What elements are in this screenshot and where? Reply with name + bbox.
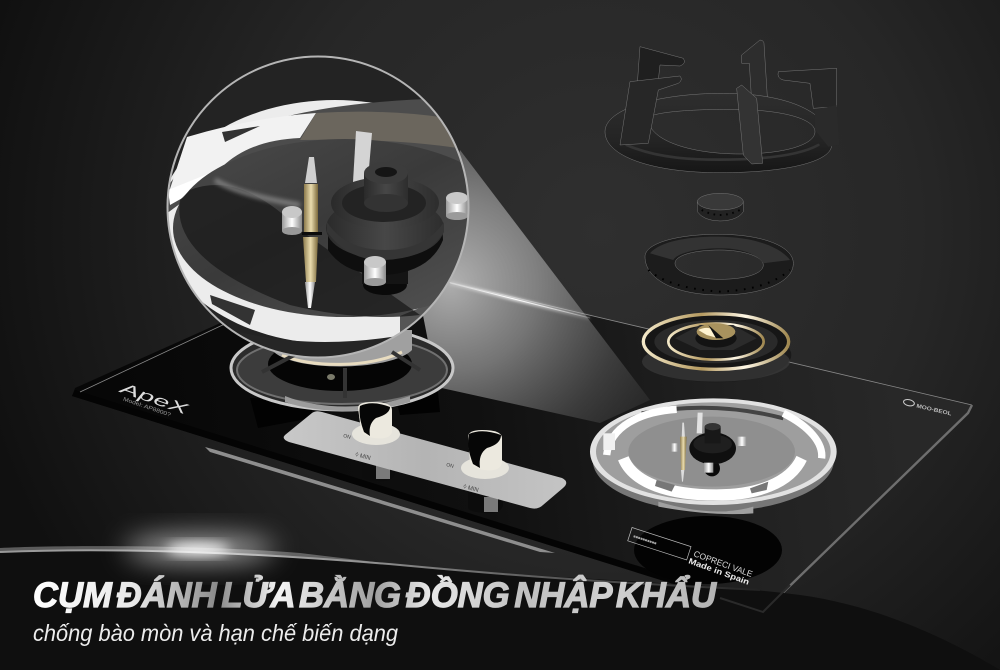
chrome highlights xyxy=(607,409,677,455)
igniter electrode xyxy=(302,157,322,308)
white electrode rod xyxy=(353,131,372,182)
ring xyxy=(605,93,832,173)
ring body xyxy=(645,234,793,295)
cap side xyxy=(697,202,743,221)
bottom dark band xyxy=(0,537,1000,670)
centre bolt xyxy=(327,374,335,380)
knob right min label: ◊ MIN xyxy=(462,483,479,494)
mini housing xyxy=(704,460,720,476)
screw front xyxy=(364,256,386,286)
cooktop glass panel xyxy=(72,261,972,612)
chrome ring in lens xyxy=(168,100,420,342)
base shadow side xyxy=(641,328,791,382)
band glow sheen xyxy=(0,546,400,565)
exploded part: burner ring xyxy=(645,234,793,295)
inner plate xyxy=(628,417,795,487)
Made in Spain: Made in Spain xyxy=(687,556,751,587)
black housing xyxy=(326,162,444,295)
rim screw xyxy=(603,433,615,450)
ring highlights xyxy=(650,237,790,263)
mini igniter xyxy=(682,423,685,438)
flame holes xyxy=(648,270,790,292)
ring dashes xyxy=(655,480,675,492)
brand logo: right corner xyxy=(902,398,953,418)
upper dark streak xyxy=(642,408,783,418)
exploded part: burner cap xyxy=(697,193,743,221)
right burner chrome plate xyxy=(590,398,837,514)
chrome ring xyxy=(590,398,837,505)
ring front highlight xyxy=(627,145,818,160)
lens flare core xyxy=(166,543,230,555)
stem right highlight xyxy=(484,497,498,512)
back fingers xyxy=(637,47,684,95)
glass edge through band xyxy=(720,585,790,612)
plate xyxy=(284,411,566,509)
screw left xyxy=(282,206,302,235)
subtitle: chống bào mòn và hạn chế biến dạng xyxy=(33,620,398,646)
sticker dots: ■■■■■■■■■■ xyxy=(633,533,658,546)
outer gold ring xyxy=(643,314,789,369)
burner cut-out with origin text xyxy=(628,516,782,587)
magnifier lens xyxy=(166,56,470,358)
Copreci Vale: COPRECI VALE xyxy=(692,548,754,579)
knob right labels: ON xyxy=(445,462,455,470)
brand logo: Apex xyxy=(115,379,192,424)
logo wordmark: ApeX xyxy=(116,379,192,419)
white lens flare xyxy=(125,537,275,561)
under ring xyxy=(593,408,834,512)
black cut-out xyxy=(634,516,782,584)
support arms xyxy=(262,352,420,398)
exploded part: gold burner base xyxy=(641,314,791,382)
knob left labels: ON xyxy=(342,433,352,441)
cap top xyxy=(697,193,743,210)
light beam from burner to magnifier xyxy=(420,150,650,423)
left burner on glass xyxy=(231,326,453,428)
flame holes xyxy=(702,210,740,215)
under-plate stem right xyxy=(468,486,503,513)
hub xyxy=(675,325,757,350)
mini screws xyxy=(671,443,678,452)
sticker xyxy=(628,528,691,560)
knob right xyxy=(445,430,509,479)
mini screw front xyxy=(704,463,713,473)
lower ring shading xyxy=(210,295,255,325)
screw right xyxy=(446,192,468,220)
model label: Model: AP8800? xyxy=(122,397,171,419)
title: CỤM ĐÁNH LỬA BẰNG ĐỒNG NHẬP KHẨU xyxy=(33,575,717,615)
stem left highlight xyxy=(376,464,390,479)
knob left xyxy=(342,402,400,445)
knob left min label: ◊ MIN xyxy=(354,451,371,462)
pan support feet xyxy=(250,392,440,428)
mini white rod xyxy=(697,413,703,433)
exploded part: pan support xyxy=(605,40,839,173)
logo mark xyxy=(903,398,915,407)
under-plate stem left xyxy=(362,452,395,481)
inner gold ring xyxy=(668,324,764,360)
front fingers xyxy=(620,76,681,145)
inner plate xyxy=(173,139,467,317)
logo name: MOO-BEOL xyxy=(916,403,953,418)
burner bowl xyxy=(268,337,412,391)
brass nozzle xyxy=(697,323,735,340)
chrome ring xyxy=(231,326,453,410)
knob control plate xyxy=(284,402,566,513)
front ring tab xyxy=(285,396,410,411)
